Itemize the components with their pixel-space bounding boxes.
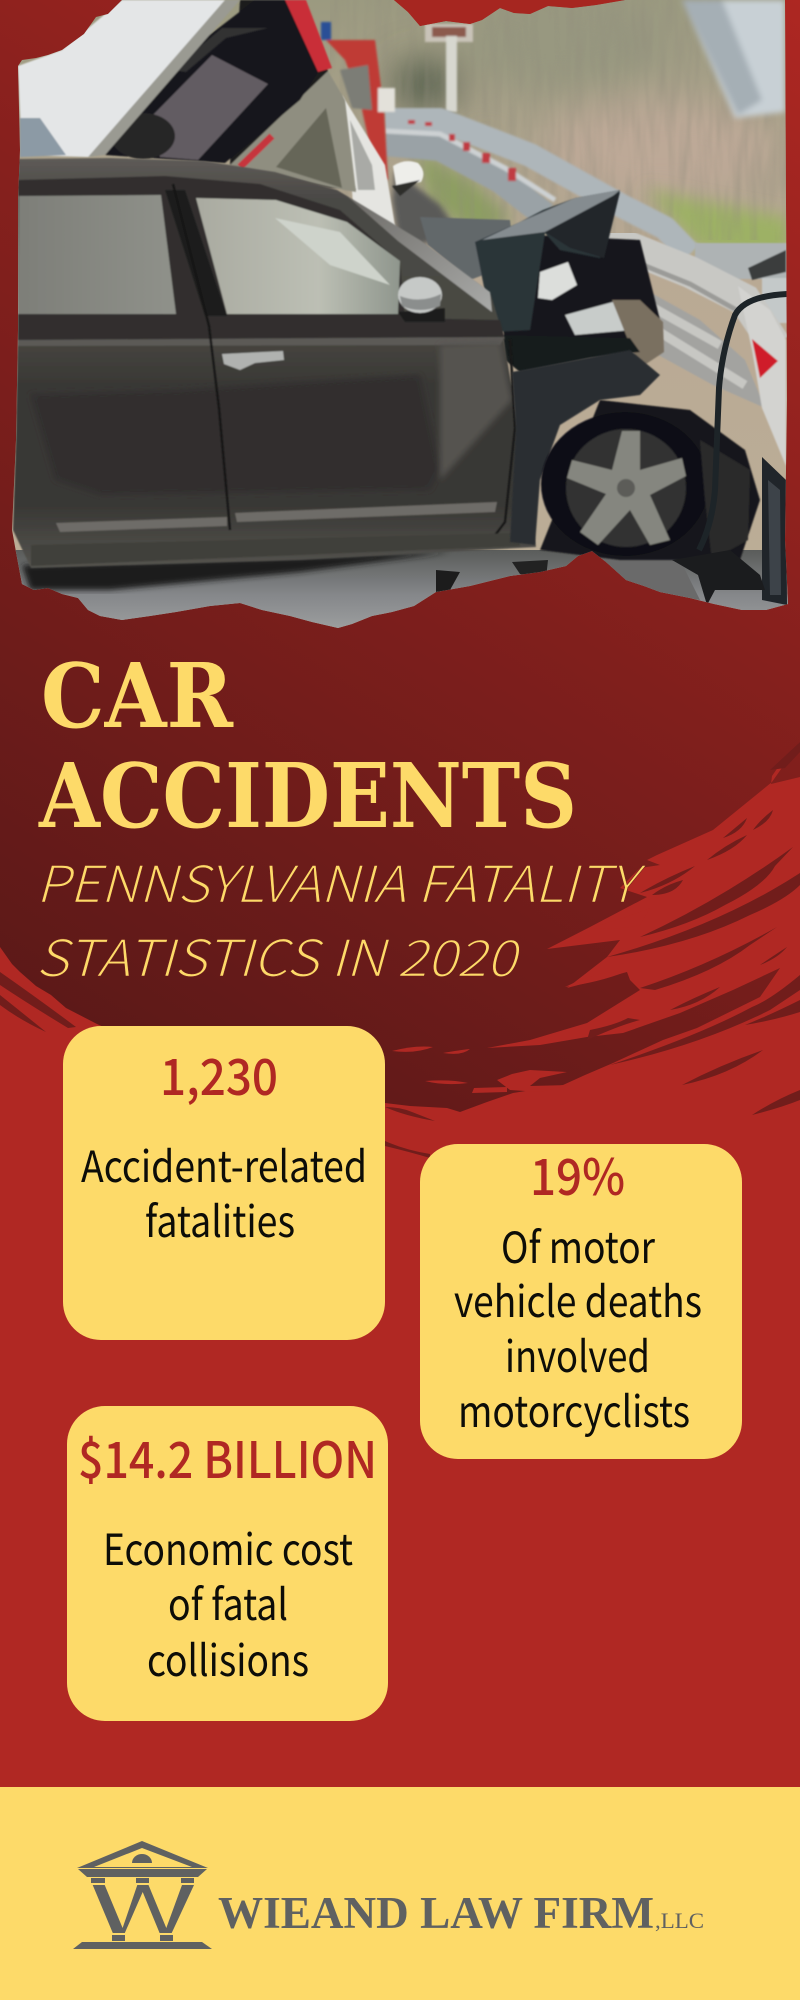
sill trim xyxy=(56,517,227,532)
stat description: Of motor xyxy=(501,1214,655,1276)
red reflector xyxy=(752,339,778,378)
front guardrail xyxy=(606,238,787,466)
subtitle xyxy=(36,845,647,991)
subtitle line 1: PENNSYLVANIA FATALITY xyxy=(36,845,647,917)
stat description: collisions xyxy=(147,1627,309,1689)
firm name: WIEAND LAW FIRM xyxy=(218,1888,654,1938)
stat description: vehicle deaths xyxy=(454,1268,702,1330)
stat description xyxy=(454,1214,702,1440)
title xyxy=(38,643,577,848)
blurred roadside background xyxy=(391,0,780,200)
stat description: Economic cost xyxy=(103,1516,353,1578)
red brush sweep xyxy=(0,742,800,1787)
stat description xyxy=(103,1516,353,1689)
front window xyxy=(196,198,400,314)
road behind xyxy=(390,171,452,246)
panel: 1,230 fatalities xyxy=(63,1026,385,1340)
black car body xyxy=(13,158,536,568)
brush flecks xyxy=(392,908,650,1093)
fire truck xyxy=(321,22,395,180)
door handle xyxy=(222,351,284,370)
road surface xyxy=(16,550,788,628)
rear window xyxy=(18,195,176,314)
stat description: Accident-related xyxy=(81,1133,367,1195)
stat description: of fatal xyxy=(168,1571,288,1633)
icon: law firm temple logo xyxy=(73,1841,212,1949)
hood edge highlight xyxy=(347,196,492,312)
panel: 19% motorcyclists xyxy=(420,1138,742,1459)
front wheel xyxy=(540,400,760,560)
door seams xyxy=(173,184,230,530)
white car behind xyxy=(342,96,424,226)
road sign xyxy=(425,24,473,112)
stat number: $14.2 BILLION xyxy=(78,1421,377,1493)
photo: crashed car on guardrail xyxy=(0,0,800,640)
concrete structure top right xyxy=(682,0,785,118)
red reflector xyxy=(607,247,625,273)
wrecked hood and engine bay xyxy=(420,190,664,372)
stat description: motorcyclists xyxy=(458,1378,690,1440)
title line 2: ACCIDENTS xyxy=(38,743,577,848)
panel: $14.2 billion cost xyxy=(67,1406,388,1721)
rear guardrail xyxy=(385,120,690,254)
front fender xyxy=(510,350,660,545)
side mirror xyxy=(398,308,445,322)
subtitle line 2: STATISTICS IN 2020 xyxy=(36,919,522,991)
dry grass texture xyxy=(344,78,786,240)
stat number: 1,230 xyxy=(160,1038,278,1110)
firm suffix: ,LLC xyxy=(655,1908,704,1933)
dark post and debris xyxy=(672,457,787,605)
brush streaks xyxy=(0,742,800,1158)
top torn edge fill xyxy=(394,0,625,26)
stat description: involved xyxy=(505,1323,650,1385)
stat number: 19% xyxy=(530,1138,625,1210)
stat description: fatalities xyxy=(145,1188,295,1250)
stat description xyxy=(81,1133,367,1250)
title line 1: CAR xyxy=(41,643,234,748)
black hose xyxy=(699,294,787,550)
footer band xyxy=(0,1787,800,2000)
silver van rear door xyxy=(18,0,356,192)
